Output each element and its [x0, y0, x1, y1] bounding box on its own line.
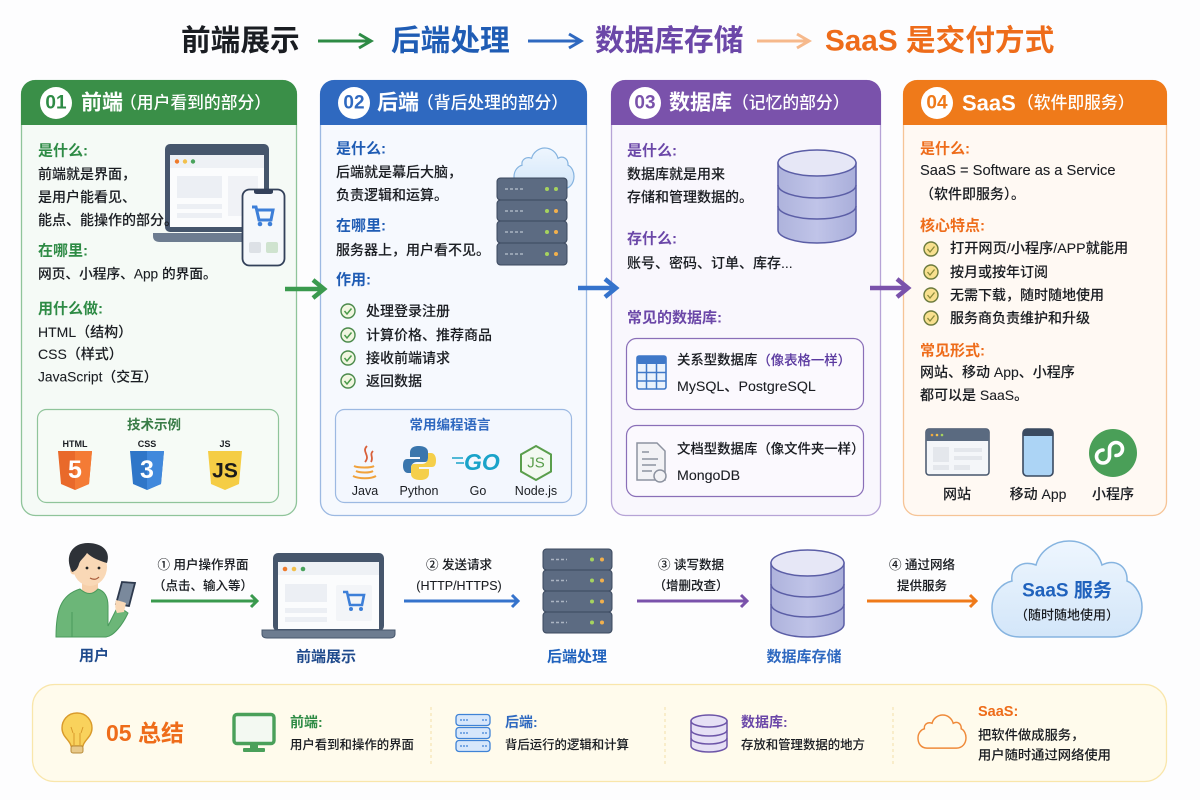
- icon: CSS3: CSS: [138, 439, 156, 449]
- panel: 后端: 作用:: [336, 272, 371, 288]
- panel: SaaS: SaaS = Software as a Service: [920, 163, 1116, 179]
- panel: SaaS: [903, 80, 1167, 516]
- icon: cloud and server: [497, 148, 574, 265]
- panel: 前端: 前端: [81, 92, 123, 114]
- panel: 前端: 01: [45, 92, 67, 114]
- panel: 数据库: 03: [634, 92, 656, 114]
- flow: database 数据库存储: [766, 550, 844, 666]
- checklist: 核心特点: 按月或按年订阅: [950, 264, 1048, 280]
- arrow: 前端 to 后端: [285, 280, 324, 298]
- panel: 总结: [32, 684, 1166, 782]
- arrow: step 1: [151, 557, 257, 607]
- title: 后端处理: [391, 24, 510, 58]
- icon: CSS3: [130, 439, 164, 490]
- panel: 后端: 是什么:: [336, 140, 386, 158]
- card: 关系型数据库: [626, 338, 864, 410]
- panel: 数据库: 常见的数据库:: [627, 308, 722, 326]
- item: SaaS: 用户随时通过网络使用: [978, 746, 1111, 762]
- arrow: step 3: （增删改查）: [653, 578, 729, 593]
- title: 数据库存储: [595, 24, 743, 58]
- icon: 网站: [926, 429, 989, 502]
- flow: user: [56, 543, 135, 664]
- flow: SaaS cloud: （随时随地使用）: [1015, 608, 1119, 622]
- panel: 数据库: 存储和管理数据的。: [627, 189, 753, 205]
- panel: 数据库: 存什么:: [627, 230, 677, 248]
- panel: 后端: 后端: [377, 92, 419, 114]
- arrow: step 4: 提供服务: [897, 578, 947, 593]
- panel: 总结: 05 总结: [106, 720, 184, 746]
- arrow: step 2: [404, 557, 518, 607]
- icon: Node.js: [515, 446, 557, 498]
- card: 文档型数据库: 文档型数据库（像文件夹一样）: [677, 440, 864, 456]
- card: 关系型数据库: 关系型数据库（像表格一样）: [677, 352, 851, 368]
- panel: 数据库: 账号、密码、订单、库存...: [627, 255, 793, 271]
- panel: 前端: [21, 80, 297, 516]
- arrow: step 3: ③ 读写数据: [658, 557, 724, 572]
- panel: 后端: [320, 80, 587, 516]
- icon: light bulb: [62, 713, 92, 753]
- checklist: 核心特点: 服务商负责维护和升级: [950, 310, 1090, 326]
- panel: SaaS: 网站、移动 App、小程序: [920, 364, 1075, 380]
- panel: 后端: （背后处理的部分）: [417, 94, 568, 112]
- panel: 前端: 用什么做:: [38, 300, 103, 318]
- icon: Python: [400, 446, 439, 498]
- panel: SaaS: 04: [926, 92, 948, 114]
- checklist: 核心特点: [924, 240, 1128, 326]
- item: 数据库: 数据库:: [741, 714, 788, 730]
- panel: 数据库: 是什么:: [627, 142, 677, 160]
- icon: JS: JS: [219, 439, 231, 449]
- icon: Node.js: JS: [527, 454, 545, 472]
- flow: laptop 前端展示: 前端展示: [296, 648, 356, 666]
- item: 后端: 后端:: [505, 714, 538, 730]
- item: 前端: 前端:: [290, 714, 323, 730]
- card: 文档型数据库: MongoDB: [677, 468, 740, 484]
- panel: 后端: 在哪里:: [336, 218, 386, 234]
- panel: 数据库: 数据库: [669, 92, 732, 114]
- checklist: 核心特点: 打开网页/小程序/APP就能用: [950, 240, 1128, 257]
- arrow: 数据库 to SaaS: [870, 279, 908, 297]
- item: SaaS: 把软件做成服务，: [978, 728, 1084, 742]
- panel: 前端: 网页、小程序、App 的界面。: [38, 266, 217, 282]
- checklist: 作用: 处理登录注册: [366, 303, 450, 319]
- checklist: 作用: 返回数据: [366, 373, 422, 389]
- item: 数据库: 存放和管理数据的地方: [741, 737, 865, 752]
- card: 文档型数据库: [626, 426, 864, 496]
- arrow: step 4: ④ 通过网络: [889, 557, 955, 572]
- checklist: 作用: [341, 303, 492, 389]
- title: SaaS 是交付方式: [825, 24, 1054, 58]
- arrow: step 4: [867, 557, 976, 607]
- panel: SaaS: （软件即服务）。: [920, 186, 1025, 202]
- panel: 前端: （用户看到的部分）: [120, 94, 271, 112]
- item: 后端: 背后运行的逻辑和计算: [505, 737, 629, 752]
- icon: 小程序: [1089, 429, 1137, 502]
- panel: 前端: JavaScript（交互）: [38, 368, 158, 384]
- arrow: 后端 to 数据库: [578, 279, 616, 297]
- flow: SaaS cloud: [992, 541, 1142, 637]
- panel: SaaS: SaaS: [962, 90, 1016, 116]
- panel: SaaS: 核心特点:: [920, 216, 985, 234]
- box: 技术示例: 技术示例: [127, 416, 181, 432]
- panel: 前端: CSS（样式）: [38, 346, 123, 362]
- panel: SaaS: （软件即服务）: [1017, 94, 1134, 112]
- flow: server 后端处理: 后端处理: [547, 648, 607, 666]
- card: 关系型数据库: MySQL、PostgreSQL: [677, 379, 816, 395]
- panel: 数据库: （记忆的部分）: [732, 94, 849, 112]
- arrow: step 2: ② 发送请求: [426, 557, 492, 572]
- icon: Python: Python: [400, 484, 439, 498]
- item: 前端: [234, 714, 414, 752]
- flow: server 后端处理: [543, 549, 612, 666]
- item: SaaS: SaaS:: [978, 704, 1018, 720]
- box: 常用编程语言: 常用编程语言: [410, 416, 490, 432]
- arrow: step 2: (HTTP/HTTPS): [416, 579, 502, 593]
- flow: SaaS cloud: SaaS 服务: [1022, 580, 1112, 602]
- panel: 前端: 能点、能操作的部分。: [38, 212, 178, 228]
- panel: 数据库: 数据库就是用来: [627, 166, 725, 182]
- icon: 网站: 网站: [943, 486, 971, 502]
- panel: 数据库: [611, 80, 881, 516]
- box: 技术示例: [38, 410, 278, 502]
- arrow: step 3: [637, 557, 747, 607]
- panel: 前端: 在哪里:: [38, 242, 88, 260]
- icon: JS: JS: [212, 460, 238, 482]
- box: 常用编程语言: [336, 410, 572, 502]
- item: SaaS: [918, 704, 1111, 762]
- icon: laptop and phone: [153, 144, 284, 266]
- panel: 后端: 02: [343, 92, 365, 114]
- icon: HTML5: HTML: [62, 439, 88, 449]
- icon: Java: Java: [352, 484, 378, 498]
- icon: 小程序: 小程序: [1092, 486, 1134, 502]
- icon: database: [778, 150, 856, 243]
- item: 数据库: [691, 714, 865, 752]
- icon: HTML5: 5: [68, 456, 82, 484]
- checklist: 核心特点: 无需下载，随时随地使用: [950, 287, 1104, 303]
- icon: HTML5: [58, 439, 92, 490]
- icon: 移动 App: 移动 App: [1010, 486, 1067, 502]
- icon: CSS3: 3: [140, 456, 154, 484]
- panel: 前端: HTML（结构）: [38, 324, 132, 340]
- panel: SaaS: 常见形式:: [920, 342, 985, 360]
- arrow: step 1: ① 用户操作界面: [158, 557, 248, 572]
- title: [181, 24, 1054, 58]
- flow: database 数据库存储: 数据库存储: [766, 648, 842, 666]
- icon: Go: GO: [464, 449, 500, 475]
- flow: user: 用户: [79, 646, 109, 664]
- panel: 后端: 后端就是幕后大脑，: [336, 164, 462, 180]
- arrow: step 1: （点击、输入等）: [153, 578, 253, 593]
- icon: JS: [208, 439, 242, 490]
- checklist: 作用: 计算价格、推荐商品: [366, 327, 492, 343]
- title: 前端展示: [181, 24, 300, 58]
- panel: 后端: 负责逻辑和运算。: [336, 187, 448, 203]
- flow: laptop 前端展示: [262, 553, 395, 666]
- panel: 前端: 是什么:: [38, 142, 88, 160]
- item: 后端: [456, 714, 629, 752]
- checklist: 作用: 接收前端请求: [366, 350, 450, 366]
- panel: 后端: 服务器上，用户看不见。: [336, 242, 490, 258]
- icon: Go: [452, 449, 500, 498]
- panel: 前端: 前端就是界面，: [38, 166, 136, 182]
- panel: SaaS: 都可以是 SaaS。: [920, 387, 1028, 403]
- icon: Java: [352, 446, 378, 498]
- panel: SaaS: 是什么:: [920, 140, 970, 158]
- panel: 前端: 是用户能看见、: [38, 189, 136, 205]
- icon: 移动 App: [1010, 429, 1067, 502]
- item: 前端: 用户看到和操作的界面: [290, 737, 414, 752]
- icon: Go: Go: [470, 484, 486, 498]
- icon: Node.js: Node.js: [515, 484, 557, 498]
